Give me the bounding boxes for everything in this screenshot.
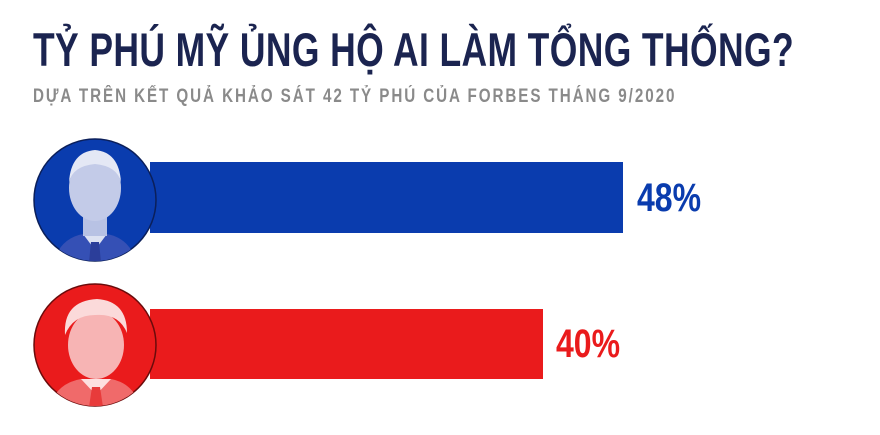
- bar: Biden: [150, 162, 623, 233]
- value: Biden: 48%: [637, 176, 701, 220]
- value: Trump: 40%: [556, 322, 620, 366]
- portrait: Biden: [33, 138, 157, 262]
- subtitle: DỰA TRÊN KẾT QUẢ KHẢO SÁT 42 TỶ PHÚ CỦA FORBES THÁNG 9/2020: [33, 86, 676, 107]
- bar: Trump: [150, 309, 543, 379]
- portrait: Trump: [33, 283, 157, 407]
- title: TỶ PHÚ MỸ ỦNG HỘ AI LÀM TỔNG THỐNG?: [33, 23, 794, 76]
